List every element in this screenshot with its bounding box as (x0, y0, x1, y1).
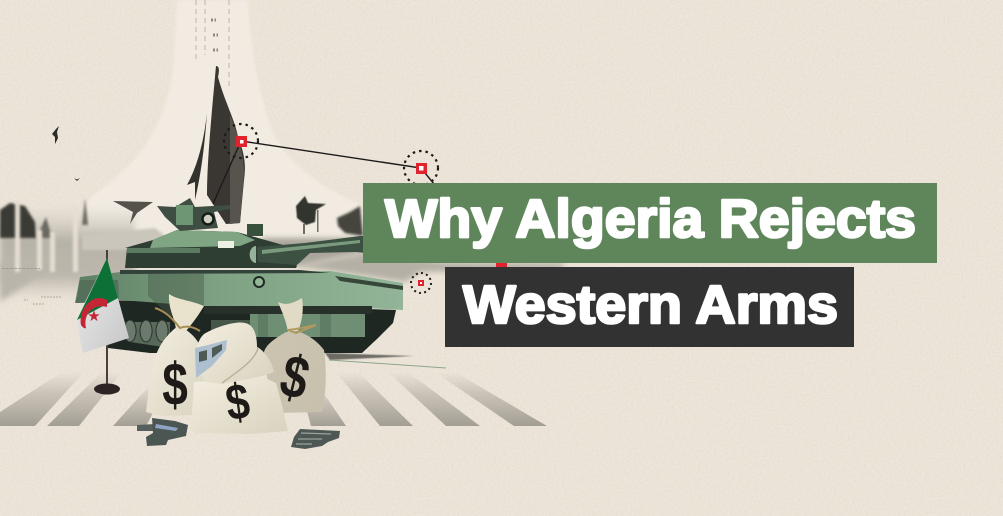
front bag (190, 372, 288, 434)
title bar: Western Arms: Western Arms (463, 275, 838, 335)
tiny faint annotations (2, 268, 62, 304)
money pile left (137, 418, 188, 446)
tank (75, 198, 403, 353)
right bag (264, 298, 326, 413)
banknotes in bag (195, 340, 227, 378)
monument backdrop (82, 0, 365, 240)
monument sail (187, 66, 245, 224)
tank turret (125, 230, 297, 268)
flag cloth green (77, 258, 118, 320)
tank upper hull (75, 271, 403, 310)
birds (52, 126, 80, 181)
front bag: $ (222, 372, 253, 431)
title bar: Why Algeria Rejects: Why Algeria Rejects (385, 189, 916, 249)
crossing stripes (0, 372, 547, 426)
annotation dashed circles and connector lines (213, 124, 438, 293)
tank gun barrel (257, 236, 366, 265)
money bags (146, 294, 326, 434)
tank cupola (157, 198, 230, 231)
blurred city skyline (0, 198, 565, 302)
flag cloth white (76, 258, 129, 353)
Algerian desk flag (76, 250, 129, 394)
flag crescent and star (81, 298, 107, 328)
flag crescent and star: ★ (87, 307, 101, 325)
tank shadow (325, 353, 446, 368)
palm trees (296, 196, 363, 236)
left bag: $ (162, 352, 188, 418)
left bag (146, 294, 210, 418)
title bar: Why Algeria Rejects (363, 183, 937, 263)
tank tracks and lower hull (108, 300, 396, 353)
tilted top bag (195, 323, 274, 384)
flag pole and base (94, 250, 120, 394)
right bag: $ (274, 342, 316, 413)
annotation nodes (236, 136, 507, 286)
money pile right (291, 429, 340, 449)
title bar: Western Arms (445, 267, 854, 347)
tank wheels and side plates (120, 312, 365, 348)
